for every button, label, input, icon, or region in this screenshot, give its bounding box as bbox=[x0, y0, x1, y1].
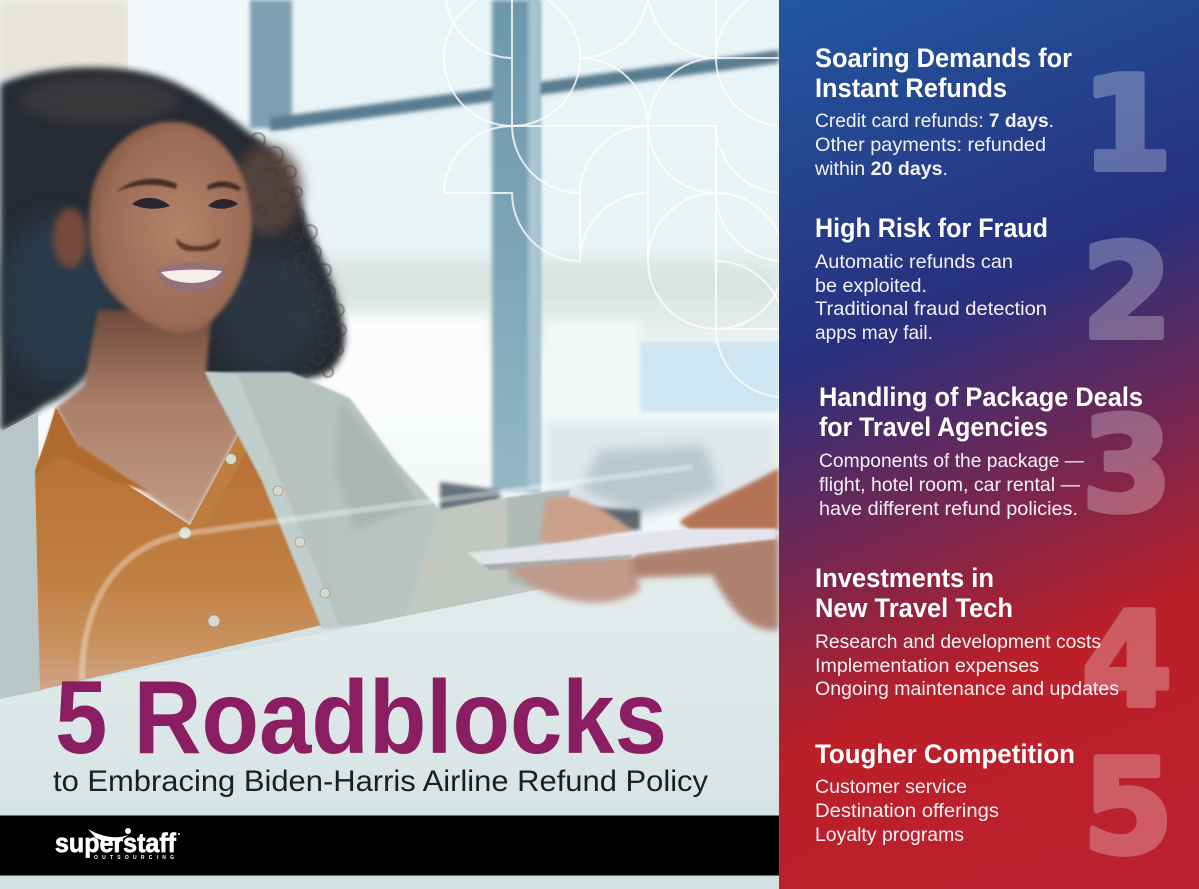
roadblock 3 title: Handling of Package Deals bbox=[819, 382, 1143, 412]
roadblock 5 text: Destination offerings bbox=[815, 800, 999, 822]
roadblock 2 text: apps may fail. bbox=[815, 322, 933, 344]
panel: gradient sidebar bbox=[779, 0, 1199, 889]
roadblock 1 text bbox=[814, 110, 1054, 180]
roadblock 1 text: Other payments: refunded bbox=[815, 134, 1046, 156]
number 5: 5 bbox=[1083, 731, 1173, 883]
woman: face bbox=[53, 122, 252, 333]
roadblock 4 text: Research and development costs bbox=[815, 631, 1101, 653]
roadblock 3 bbox=[819, 382, 1172, 541]
woman: blouse buttons bbox=[179, 454, 330, 627]
roadblock 2 text: Automatic refunds can bbox=[815, 251, 1013, 273]
roadblock 1 title bbox=[815, 43, 1072, 103]
roadblock 4 bbox=[815, 563, 1172, 736]
footer bar bbox=[0, 816, 779, 876]
roadblock 2 title: High Risk for Fraud bbox=[815, 213, 1048, 243]
roadblock 4 title bbox=[815, 563, 1013, 623]
panel: photo of agent handing a document across a counter bbox=[0, 0, 779, 732]
roadblock 4 text bbox=[815, 631, 1119, 700]
roadblock 2 text: Traditional fraud detection bbox=[815, 298, 1047, 320]
roadblock 3 title bbox=[819, 382, 1143, 442]
roadblock 2 bbox=[815, 213, 1172, 368]
number 4: 4 bbox=[1082, 584, 1172, 736]
roadblock 2 text: be exploited. bbox=[815, 275, 927, 297]
number 3: 3 bbox=[1082, 389, 1172, 541]
woman: cardigan and blouse bbox=[0, 372, 570, 720]
roadblock 1 text: Credit card refunds: 7 days. bbox=[815, 110, 1054, 132]
roadblock 5 bbox=[815, 731, 1173, 883]
roadblock 1 text: within 20 days. bbox=[814, 158, 948, 180]
glass reflection streak bbox=[82, 467, 693, 680]
roadblock 5 text bbox=[815, 776, 999, 846]
number 2: 2 bbox=[1082, 216, 1172, 368]
roadblock 4 text: Implementation expenses bbox=[815, 655, 1039, 677]
roadblock 2 text bbox=[815, 251, 1047, 344]
woman: hair bbox=[0, 68, 346, 432]
hands passing a document bbox=[468, 468, 779, 630]
logo: Superstaff Outsourcing: OUTSOURCING bbox=[94, 855, 174, 861]
counter desk bbox=[0, 576, 779, 732]
roadblock 3 title: for Travel Agencies bbox=[819, 412, 1048, 442]
heading: 5 Roadblocks: 5 Roadblocks bbox=[55, 660, 667, 776]
roadblock 5 text: Customer service bbox=[815, 776, 967, 798]
roadblock 4 title: New Travel Tech bbox=[815, 593, 1013, 623]
woman: neck and chest bbox=[56, 310, 240, 525]
subheading: to Embracing Biden-Harris Airline Refund Policy bbox=[53, 765, 708, 798]
roadblock 4 text: Ongoing maintenance and updates bbox=[815, 678, 1119, 700]
logo: Superstaff Outsourcing: superstaff bbox=[55, 828, 177, 858]
roadblock 1 title: Instant Refunds bbox=[815, 73, 1007, 103]
roadblock 1 bbox=[814, 43, 1172, 200]
roadblock 1 title: Soaring Demands for bbox=[815, 43, 1072, 73]
roadblock 3 text bbox=[819, 450, 1084, 520]
roadblock 5 title: Tougher Competition bbox=[815, 739, 1075, 769]
roadblock 4 title: Investments in bbox=[815, 563, 994, 593]
window background bbox=[0, 0, 779, 556]
roadblock 3 text: have different refund policies. bbox=[819, 498, 1078, 520]
roadblock 3 text: Components of the package — bbox=[819, 450, 1084, 472]
decorative line pattern bbox=[443, 0, 779, 398]
roadblock 5 text: Loyalty programs bbox=[815, 824, 964, 846]
roadblock 3 text: flight, hotel room, car rental — bbox=[819, 474, 1080, 496]
number 1: 1 bbox=[1082, 48, 1172, 200]
hair curls along the right edge bbox=[251, 133, 346, 377]
